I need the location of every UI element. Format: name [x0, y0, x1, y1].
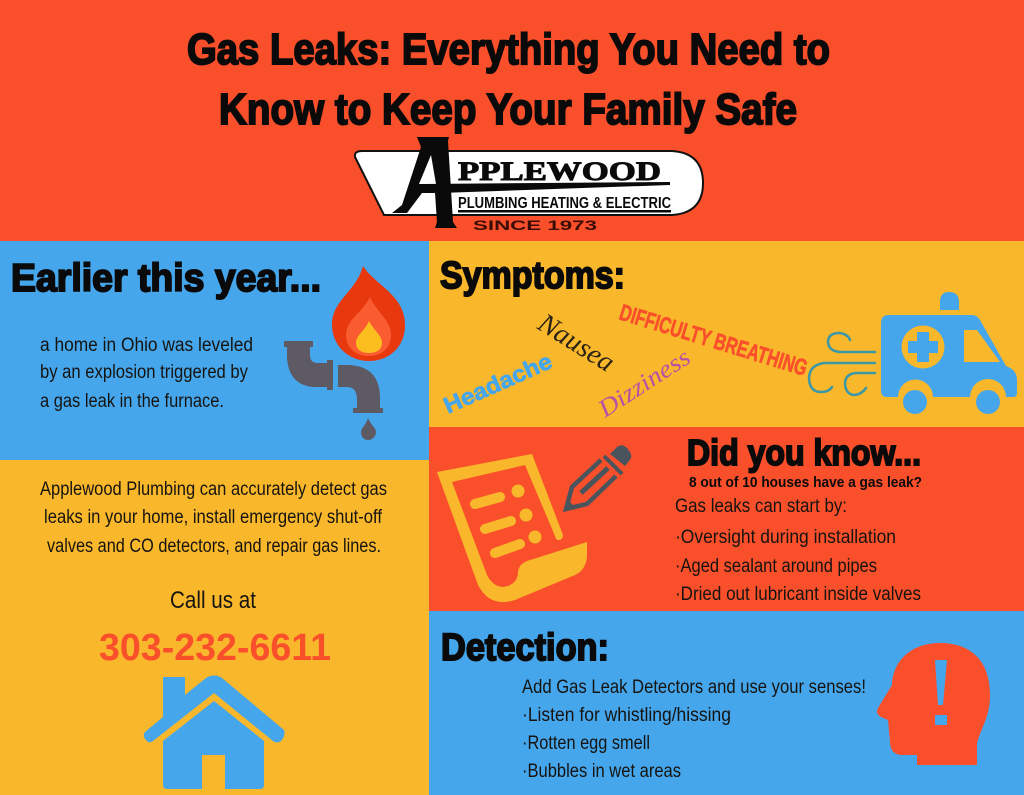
icon: house	[144, 676, 285, 789]
symptom: nausea: Nausea	[531, 307, 620, 378]
panel: detection	[429, 611, 1024, 795]
phone number: 303-232-6611	[99, 627, 331, 669]
symptom: difficulty breathing: DIFFICULTY BREATHING	[617, 299, 811, 381]
title	[187, 25, 830, 134]
logo: Applewood	[355, 137, 703, 233]
heading: earlier this year: Earlier this year...	[11, 257, 321, 300]
text: Ohio explosion: a gas leak in the furnace.	[40, 391, 224, 412]
panel: symptoms	[429, 241, 1024, 427]
icon: ambulance	[809, 292, 1017, 414]
text: causes list	[675, 496, 921, 605]
text: detection tips: Add Gas Leak Detectors and use your senses!	[522, 677, 866, 698]
text: detection tips: ·Bubbles in wet areas	[522, 761, 681, 782]
panel: applewood services	[0, 460, 429, 795]
symptom: headache: Headache	[439, 348, 556, 419]
icon: flame and leaking pipe	[284, 266, 405, 440]
text: causes list: ·Oversight during installation	[675, 527, 896, 548]
panel: did you know	[429, 427, 1024, 611]
text: Ohio explosion: a home in Ohio was leveled	[40, 335, 253, 356]
text: detection tips: ·Rotten egg smell	[522, 733, 650, 754]
text: services	[40, 479, 387, 557]
text: causes list: ·Aged sealant around pipes	[675, 556, 877, 577]
text: Ohio explosion	[40, 335, 253, 412]
logo: Applewood: PLUMBING HEATING & ELECTRIC	[458, 195, 671, 212]
logo: Applewood: SINCE 1973	[473, 217, 597, 233]
logo: Applewood: PPLEWOOD	[458, 157, 661, 186]
panel: header	[0, 0, 1024, 241]
heading: detection: Detection:	[441, 627, 609, 669]
title: Know to Keep Your Family Safe	[219, 85, 797, 134]
icon: head with exclamation mark	[877, 643, 990, 765]
text: call us at: Call us at	[170, 587, 256, 614]
text: Ohio explosion: by an explosion triggered by	[40, 362, 248, 383]
text: detection tips: ·Listen for whistling/hissing	[522, 705, 731, 726]
heading: symptoms: Symptoms:	[440, 255, 625, 297]
symptom: dizziness: Dizziness	[593, 344, 695, 424]
icon: checklist and pencil	[437, 445, 631, 602]
text: services: leaks in your home, install emergency shut-off	[44, 507, 383, 528]
title: Gas Leaks: Everything You Need to	[187, 25, 830, 74]
heading: did you know: Did you know...	[687, 432, 921, 473]
text: statistic: 8 out of 10 houses have a gas leak?	[689, 475, 922, 491]
text: services: valves and CO detectors, and repair gas lines.	[47, 536, 381, 557]
text: services: Applewood Plumbing can accurately detect gas	[40, 479, 387, 500]
panel: earlier this year	[0, 241, 429, 460]
text: causes list: ·Dried out lubricant inside valves	[675, 584, 921, 605]
text: detection tips	[522, 677, 866, 782]
text: causes list: Gas leaks can start by:	[675, 496, 847, 517]
